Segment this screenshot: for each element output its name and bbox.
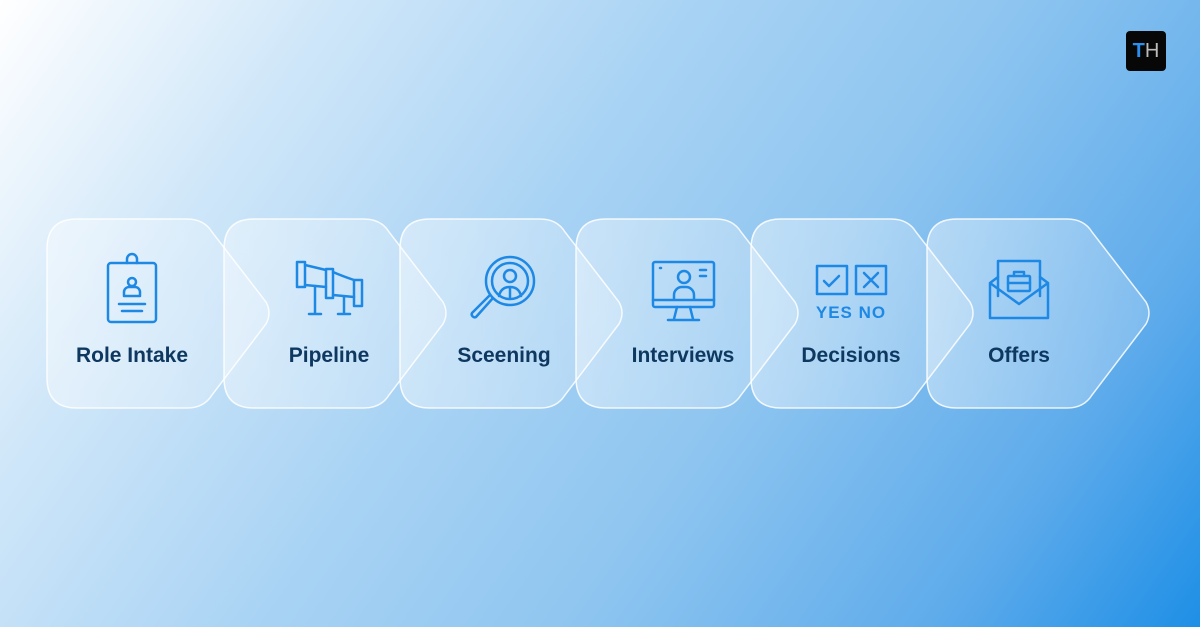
icon: envelope briefcase bbox=[990, 261, 1048, 318]
text: YES NO: YES NO bbox=[816, 303, 886, 322]
icon: yes no bbox=[817, 266, 886, 294]
logo: TH: TH bbox=[1133, 40, 1159, 62]
label: Pipeline: Pipeline bbox=[289, 344, 369, 367]
label: Role Intake: Role Intake bbox=[76, 344, 188, 367]
chevron 4 bbox=[576, 219, 798, 408]
label: Interviews: Interviews bbox=[632, 344, 734, 367]
chevron 2 bbox=[224, 219, 446, 408]
chevron 6 bbox=[927, 219, 1149, 408]
chevron 3 bbox=[400, 219, 622, 408]
icon: pipeline bbox=[297, 262, 362, 314]
label: Offers: Offers bbox=[988, 344, 1050, 367]
label: Sceening: Sceening bbox=[457, 344, 551, 367]
label: Decisions: Decisions bbox=[801, 344, 901, 367]
chevron 5 bbox=[751, 219, 973, 408]
chevron 1 bbox=[47, 219, 269, 408]
logo: TH bbox=[1126, 31, 1166, 71]
icon: monitor bbox=[653, 262, 714, 320]
icon: search candidate bbox=[472, 257, 534, 317]
icon: id badge bbox=[108, 254, 156, 322]
